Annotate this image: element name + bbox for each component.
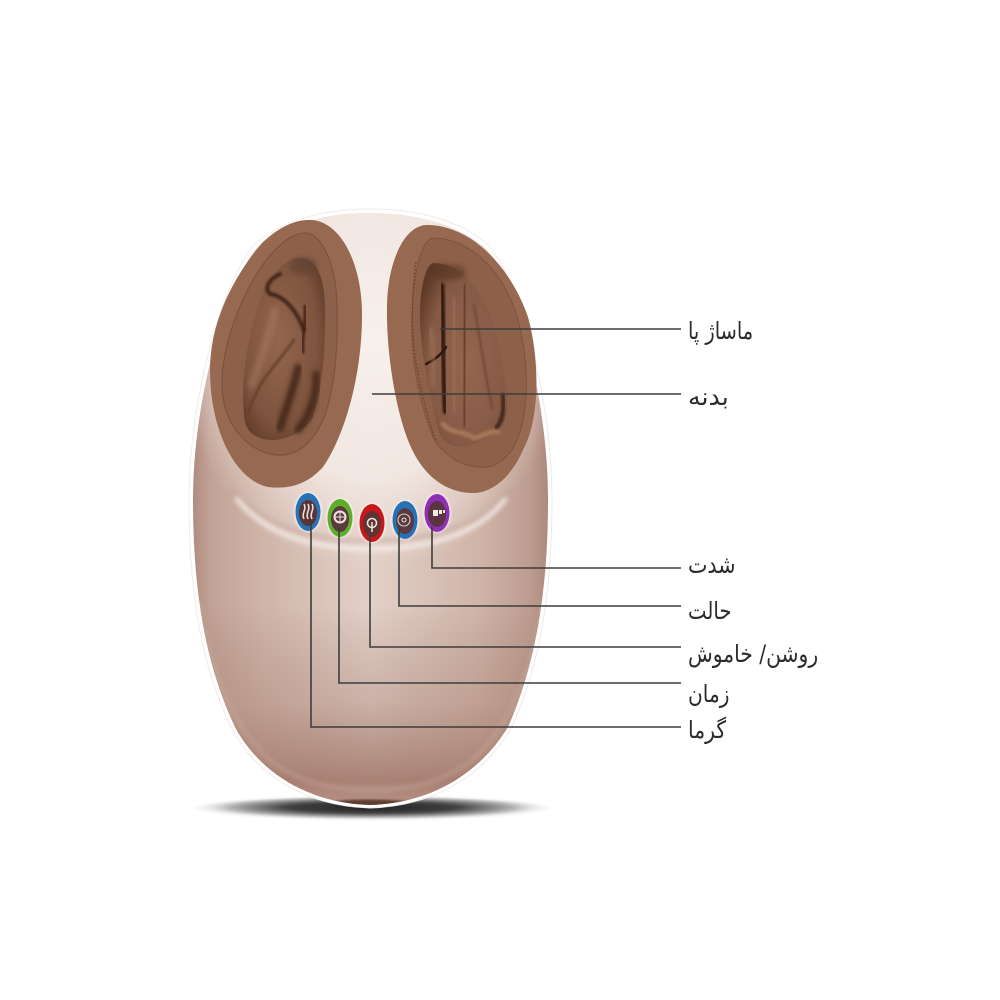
label: foot massage: ماساژ پا: [688, 317, 753, 345]
leader line: intensity: [432, 527, 681, 568]
fabric folds, left: [248, 274, 316, 430]
button: heat: [294, 492, 322, 532]
button: power: [358, 503, 386, 543]
label: intensity: شدت: [688, 551, 736, 579]
right foot opening: [387, 225, 536, 493]
label: body: بدنه: [688, 383, 729, 411]
button: mode: [391, 500, 419, 540]
leader line: on/off: [370, 532, 681, 647]
label: on/off: روشن/ خاموش: [688, 640, 818, 668]
ground shadow: [184, 797, 560, 823]
fabric folds, right: [426, 285, 503, 438]
body crease below the buttons: [232, 490, 510, 549]
button: intensity: [423, 493, 451, 533]
device body: [189, 209, 552, 810]
foot massager product illustration: [188, 208, 681, 820]
label: heat: گرما: [688, 716, 726, 744]
leader line: heat: [311, 521, 681, 727]
label: mode: حالت: [688, 597, 731, 625]
leader line: body: [372, 393, 681, 395]
button: timer: [326, 498, 354, 538]
leader line: mode: [399, 527, 681, 606]
leader line: foot massage: [440, 328, 681, 330]
label: time: زمان: [688, 680, 729, 708]
leader line: time: [339, 527, 681, 683]
left foot opening: [210, 220, 362, 488]
